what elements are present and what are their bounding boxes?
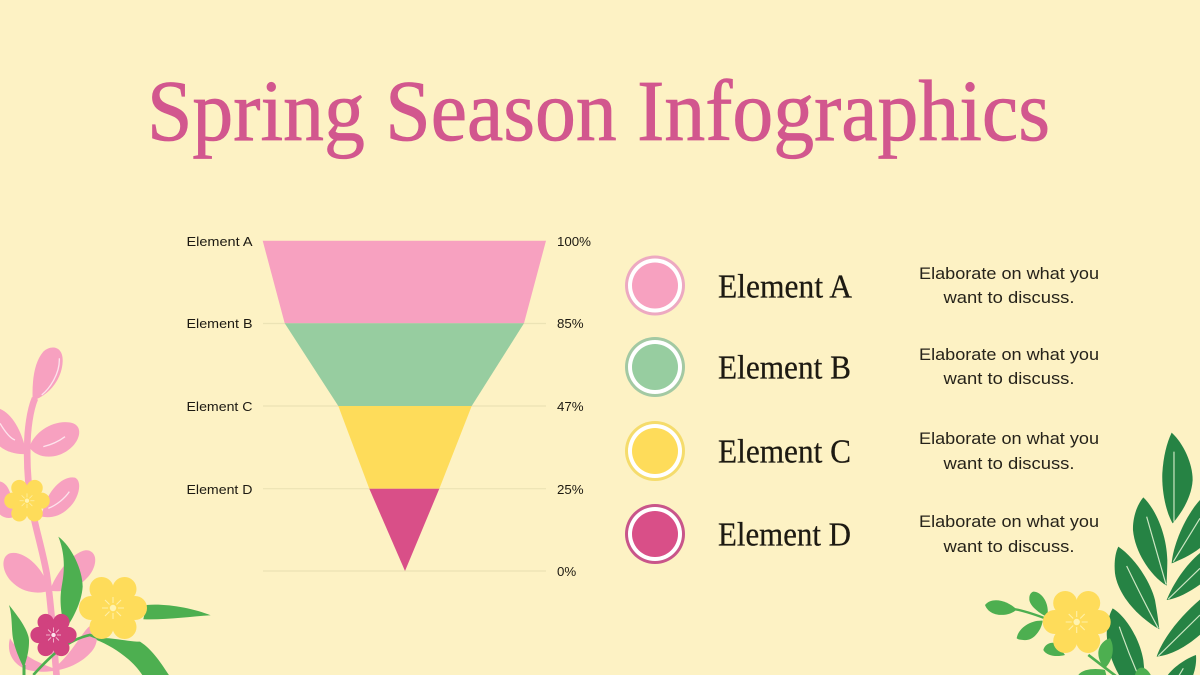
funnel segment: Element C (338, 406, 472, 489)
dark green leaves (1107, 433, 1200, 675)
legend description: want to discuss. (942, 537, 1074, 556)
legend description: want to discuss. (942, 454, 1074, 473)
legend description: want to discuss. (942, 369, 1074, 388)
funnel segment: Element D (369, 489, 439, 571)
funnel segment: Element A (263, 241, 546, 323)
swatch: magenta (625, 504, 685, 564)
flower: large yellow (79, 577, 147, 639)
legend description: Elaborate on what you (919, 429, 1099, 448)
legend row: Element D (625, 504, 1099, 564)
swatch: yellow (625, 421, 685, 481)
green leaves (9, 537, 211, 675)
chart percentage labels (557, 234, 591, 579)
flower: small yellow (4, 480, 50, 521)
chart percentage labels: 85% (557, 316, 584, 331)
chart percentage labels: 0% (557, 564, 576, 579)
legend label: Element C (718, 434, 851, 470)
title: Spring Season Infographics (147, 62, 1050, 159)
grid lines (263, 324, 546, 571)
legend row: Element A (625, 256, 1099, 316)
floral decoration: bottom left (0, 348, 211, 675)
foliage decoration: bottom right (985, 433, 1200, 675)
legend description: Elaborate on what you (919, 264, 1099, 283)
chart percentage labels: 47% (557, 399, 584, 414)
chart category labels: Element B (186, 316, 253, 331)
funnel segment: Element B (285, 323, 524, 406)
chart percentage labels: 25% (557, 482, 584, 497)
flower: yellow (1043, 591, 1111, 653)
swatch: pink (625, 256, 685, 316)
chart category labels: Element D (186, 482, 252, 497)
leaf veins (1119, 452, 1200, 675)
legend description: Elaborate on what you (919, 345, 1099, 364)
chart category labels (186, 234, 253, 497)
legend row: Element B (625, 337, 1099, 397)
legend row: Element C (625, 421, 1099, 481)
legend label: Element D (718, 516, 851, 554)
legend description: Elaborate on what you (919, 512, 1099, 531)
flower: magenta (30, 614, 77, 656)
legend label: Element B (718, 350, 851, 386)
chart percentage labels: 100% (557, 234, 591, 249)
light green sprigs (985, 592, 1152, 675)
legend description: want to discuss. (942, 288, 1074, 307)
chart category labels: Element A (186, 234, 253, 249)
legend label: Element A (718, 268, 852, 306)
chart category labels: Element C (186, 399, 253, 414)
leaf highlights (0, 358, 69, 508)
funnel chart (186, 234, 591, 579)
swatch: green (625, 337, 685, 397)
pink branch (0, 348, 97, 675)
